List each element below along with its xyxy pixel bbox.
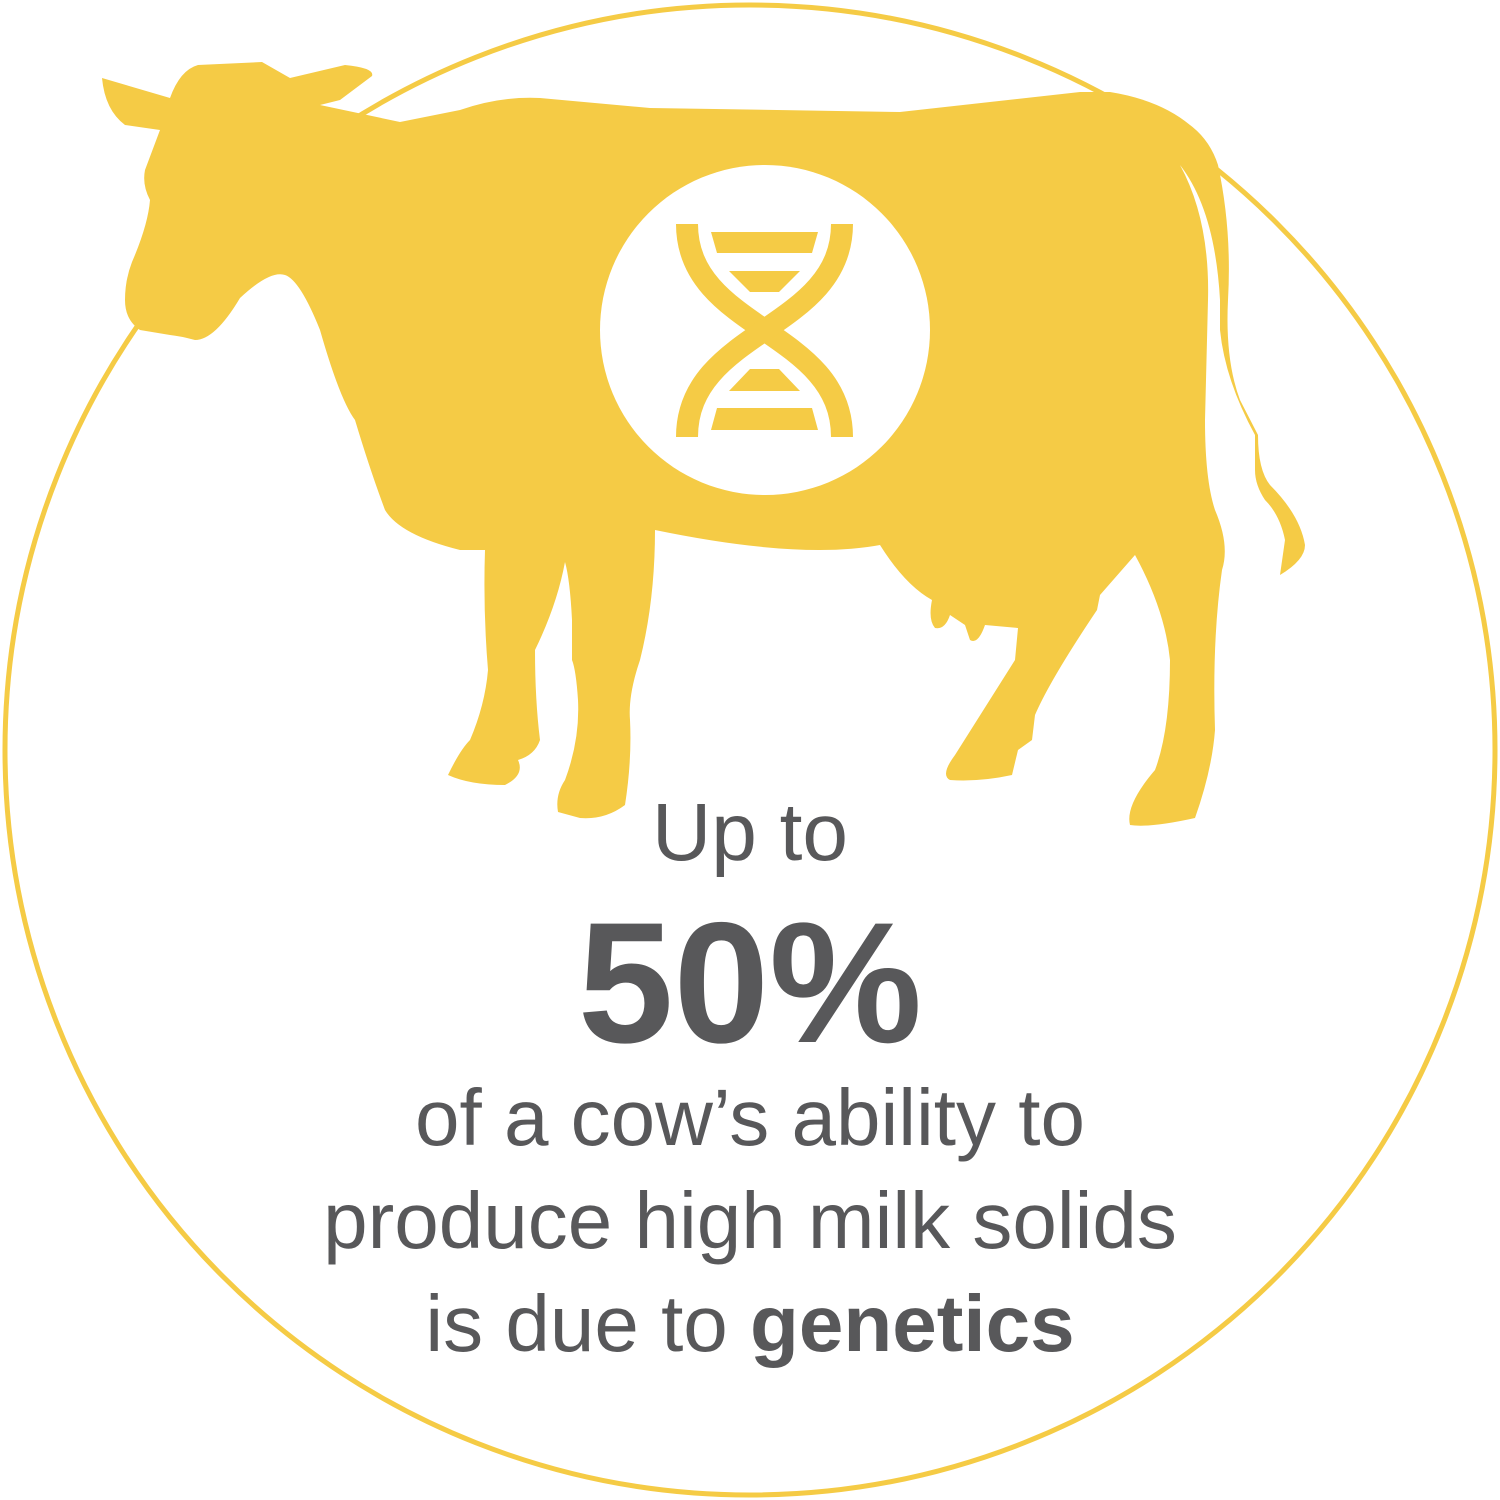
text: description: is due to genetics (425, 1279, 1075, 1368)
text: 50%: 50% (578, 887, 922, 1079)
cow silhouette (102, 62, 1305, 826)
text: description: produce high milk solids (323, 1176, 1177, 1265)
DNA badge (600, 165, 930, 495)
text: Up to: Up to (652, 787, 848, 878)
text: description (323, 1073, 1177, 1368)
text: description: of a cow’s ability to (415, 1073, 1085, 1162)
